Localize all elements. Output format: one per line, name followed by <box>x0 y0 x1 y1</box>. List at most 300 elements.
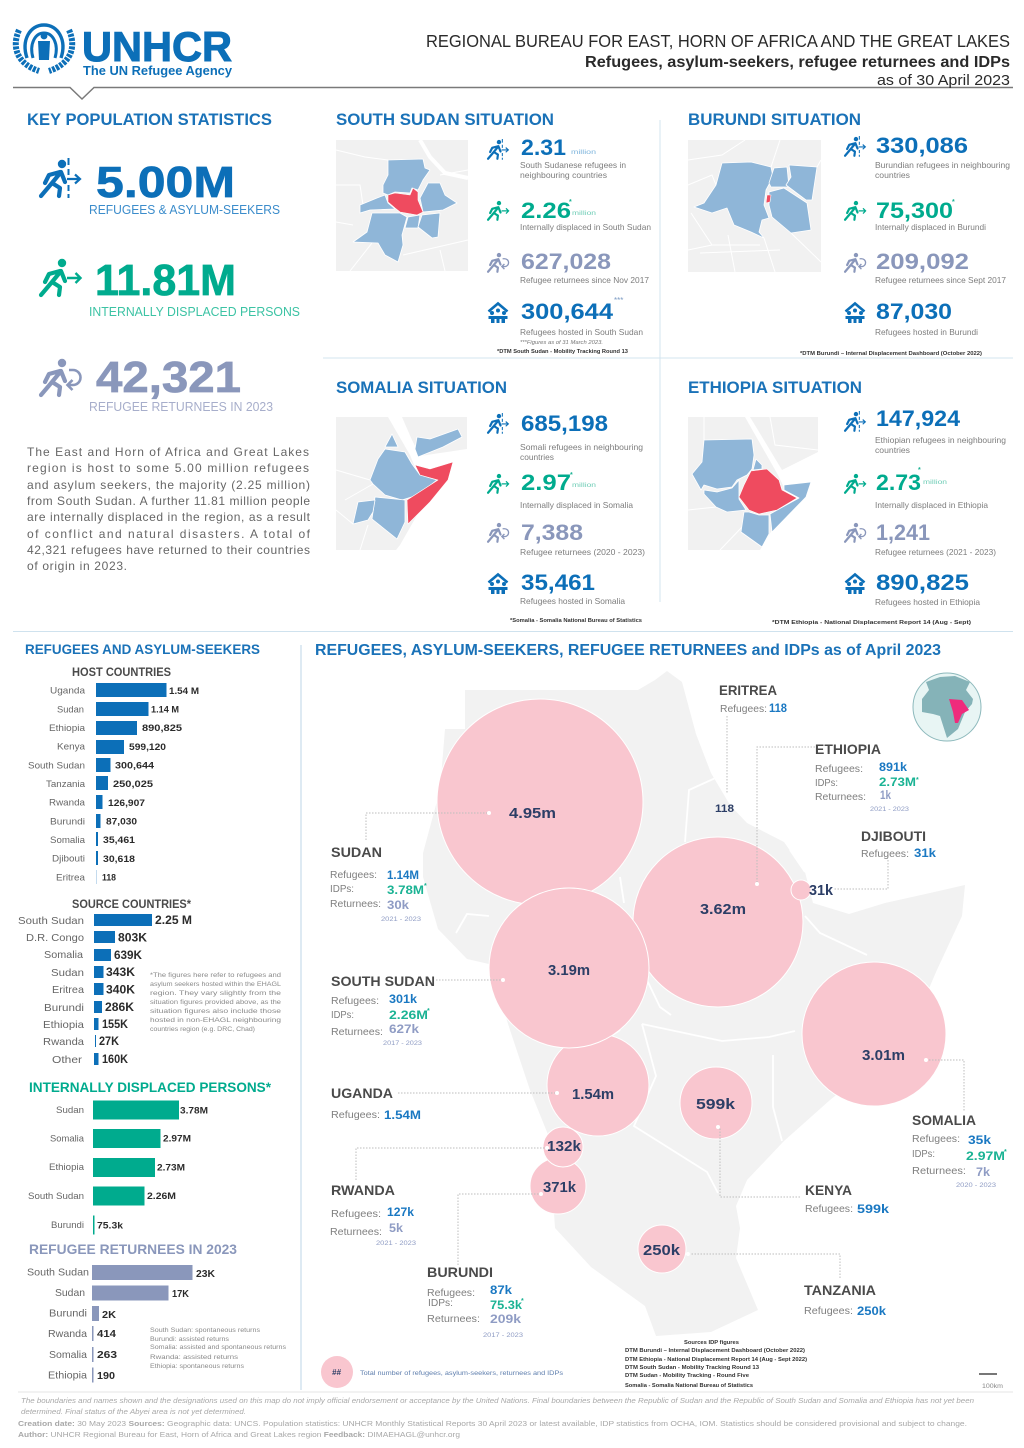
stat: Burundi IDPs <box>845 198 986 232</box>
bubble: Somalia <box>802 962 946 1106</box>
callout: South Sudan: 301k <box>389 992 417 1006</box>
bar chart: source countries: 343K <box>106 967 136 979</box>
callout: Eritrea: 118 <box>769 701 787 715</box>
stat: refugees hosted in Somalia <box>488 570 625 606</box>
callout: Burundi: 75.3k <box>490 1298 522 1312</box>
icon: UNHCR emblem <box>16 25 72 71</box>
heading: refugee returnees in 2023: REFUGEE RETURNEES IN 2023 <box>29 1241 237 1257</box>
stat: South Sudan IDPs: Internally displaced in South Sudan <box>520 222 651 232</box>
divider: situations vertical <box>659 120 661 602</box>
stat: Somali refugees: Somali refugees in neighbouring <box>520 442 643 452</box>
bar chart: host countries: 35,461 <box>103 835 136 846</box>
bubble: Tanzania <box>638 1225 686 1273</box>
callout: Somalia: 7k <box>976 1165 990 1179</box>
stat: South Sudan IDPs: * <box>569 199 572 206</box>
stat: refugee returnees: REFUGEE RETURNEES IN 2023 <box>89 400 273 414</box>
bar chart: host countries: 890,825 <box>142 723 183 734</box>
stat: Ethiopia IDPs: 2.73 <box>876 470 921 495</box>
stat: refugees and asylum-seekers: REFUGEES & ASYLUM-SEEKERS <box>89 203 280 217</box>
bar chart: returnees: Ethiopia <box>48 1370 87 1382</box>
stat: Somali refugees: 685,198 <box>521 411 608 436</box>
bubble values: 1.54m <box>572 1086 614 1103</box>
heading: key population statistics: KEY POPULATION STATISTICS <box>27 110 272 129</box>
sources: IDP figures: DTM Burundi – Internal Displacement Dashboard (October 2022) <box>625 1348 805 1354</box>
bar chart: IDPs: 2.26M <box>147 1191 176 1202</box>
text block: regional summary: The East and Horn of Africa and Great Lakes <box>27 445 309 459</box>
bar chart: host countries: 126,907 <box>108 798 145 809</box>
bar chart: host countries: 1.54 M <box>169 686 199 697</box>
bar chart: source countries: 639K <box>114 950 143 962</box>
bar chart: IDPs: South Sudan <box>28 1191 84 1202</box>
bar chart: host countries: 250,025 <box>113 779 154 790</box>
map: South Sudan neighbours <box>336 140 468 271</box>
sources: IDP figures: DTM South Sudan - Mobility Tracking Round 13 <box>625 1365 759 1371</box>
callout: Somalia: * <box>1004 1149 1007 1156</box>
callout: Sudan: IDPs: <box>330 883 354 895</box>
bar chart: host countries: 599,120 <box>129 742 166 753</box>
bubble values: 132k <box>547 1138 582 1155</box>
stat: internally displaced persons <box>41 256 300 319</box>
note: source countries: hosted in non-EHAGL neighbouring <box>150 1017 281 1024</box>
callout: Tanzania: Refugees: <box>804 1305 853 1317</box>
callout: Eritrea: ERITREA <box>719 682 777 698</box>
bar chart: host countries: Sudan <box>57 704 84 716</box>
base map <box>423 671 965 1336</box>
footer: disclaimer and credits: The boundaries and names shown and the designations used on this map do not imply official endorsement or acceptance by the United Nations. Final boundaries between the Republic of Sudan and the Republic of South Sudan and Somalia and Ethiopia has not yet been <box>21 1396 974 1405</box>
stat: refugees hosted in Burundi: Refugees hosted in Burundi <box>875 327 978 337</box>
bar chart: source countries: South Sudan <box>18 915 84 927</box>
callout: Somalia: Returnees: <box>912 1165 966 1177</box>
callout: Somalia: SOMALIA <box>912 1112 976 1128</box>
text block: regional summary: region is host to some 5.00 million refugees <box>27 461 309 475</box>
callout: Uganda: UGANDA <box>331 1085 393 1101</box>
bubble: Rwanda <box>543 1127 583 1167</box>
bar chart: returnees: 23K <box>196 1269 216 1280</box>
heading: Somalia situation: SOMALIA SITUATION <box>336 378 507 397</box>
callout: Sudan: * <box>424 883 427 890</box>
callout: South Sudan: 2.26M <box>389 1008 428 1022</box>
callout: Ethiopia <box>815 741 919 813</box>
bar chart: IDPs: Ethiopia <box>49 1162 85 1173</box>
bar chart: returnees: 17K <box>172 1289 190 1300</box>
callout: Djibouti: DJIBOUTI <box>861 828 926 844</box>
heading: Ethiopia situation: ETHIOPIA SITUATION <box>688 378 862 397</box>
bar chart: host countries: 300,644 <box>115 760 155 772</box>
stat: Somali refugees: countries <box>520 452 554 462</box>
callout: Sudan: SUDAN <box>331 844 382 860</box>
scale bar: 100km <box>982 1383 1003 1390</box>
stat: South Sudan IDPs: million <box>572 210 597 217</box>
text block: regional summary: from South Sudan. A further 11.81 million people <box>27 494 310 508</box>
text block: regional summary: of conflict and natural disasters. A total of <box>27 527 311 541</box>
footer: disclaimer and credits: Author: UNHCR Regional Bureau for East, Horn of Africa and Great Lakes region Feedback: DIMAEHAGL@unhcr.org <box>18 1430 460 1439</box>
callout: Burundi: 87k <box>490 1283 512 1297</box>
stat: Ethiopia returnees <box>845 520 996 557</box>
text block: regional summary: 42,321 refugees have returned to their countries <box>27 543 310 557</box>
bubble values: 31k <box>809 882 834 899</box>
stat: refugees hosted in South Sudan: ***Figures as of 31 March 2023. <box>520 340 603 346</box>
bar chart: source countries: Ethiopia <box>43 1019 84 1031</box>
legend: Total number of refugees, asylum-seekers, returnees and IDPs <box>360 1370 564 1377</box>
callout: Rwanda: Returnees: <box>330 1226 382 1238</box>
stat: refugees and asylum-seekers: 5.00M <box>96 158 235 207</box>
callout: South Sudan: IDPs: <box>331 1009 354 1021</box>
map: Burundi neighbours <box>688 140 821 272</box>
panel: Somalia situation <box>336 378 645 624</box>
text block: regional summary: and asylum seekers, the majority (2.25 million) <box>27 478 310 492</box>
stat: refugees hosted in South Sudan: 300,644 <box>521 299 614 324</box>
bar chart: host countries: Rwanda <box>49 798 86 808</box>
bar chart: IDPs: 3.78M <box>180 1106 208 1116</box>
callout: Ethiopia: Returnees: <box>815 791 866 803</box>
callout: Rwanda: 127k <box>387 1205 414 1219</box>
bar chart: IDPs: 2.97M <box>163 1134 191 1144</box>
title block: as of 30 April 2023 <box>877 72 1010 89</box>
sources: IDP figures <box>625 1340 807 1389</box>
bar chart: host countries: 87,030 <box>106 816 137 828</box>
panel: refugee returnees chart <box>27 1241 286 1382</box>
sources: IDP figures: DTM Ethiopia - National Displacement Report 14 (Aug - Sept 2022) <box>625 1357 807 1363</box>
divider: situations horizontal <box>323 357 1013 359</box>
stat: South Sudan returnees: 627,028 <box>521 249 611 274</box>
callout: Somalia: 2020 - 2023 <box>956 1183 997 1189</box>
callout: Sudan <box>330 844 427 923</box>
note: source countries: asylum seekers hosted within the EHAGL <box>150 981 281 988</box>
header rule with notch <box>13 88 1013 99</box>
source note: Somalia: *Somalia - Somalia National Bureau of Statistics <box>510 618 642 624</box>
scale bar <box>979 1373 1003 1390</box>
callout: Tanzania: TANZANIA <box>804 1282 876 1298</box>
callout: Kenya: KENYA <box>805 1182 852 1198</box>
bubble: Ethiopia <box>633 837 803 1007</box>
panel: internally displaced persons chart <box>28 1080 272 1234</box>
bar chart: source countries: 155K <box>102 1019 129 1031</box>
callout: Kenya: 599k <box>857 1202 889 1216</box>
callout: Somalia: 35k <box>968 1133 991 1147</box>
callout: Kenya: Refugees: <box>805 1203 853 1215</box>
stat: refugees hosted in Ethiopia: Refugees hosted in Ethiopia <box>875 597 980 607</box>
stat: Somalia IDPs: * <box>570 472 573 479</box>
stat: Burundi IDPs: 75,300 <box>876 198 953 223</box>
bubble values: 371k <box>543 1179 577 1196</box>
divider: section <box>13 630 1013 632</box>
bar chart: returnees <box>27 1265 216 1382</box>
callout: Ethiopia: 891k <box>879 760 907 774</box>
heading: South Sudan situation: SOUTH SUDAN SITUATION <box>336 110 554 129</box>
stat: Ethiopian refugees: countries <box>875 445 910 455</box>
callout: Rwanda: Refugees: <box>331 1208 381 1220</box>
stat: Ethiopia IDPs: Internally displaced in Ethiopia <box>875 500 988 510</box>
callout: Ethiopia: IDPs: <box>815 777 838 789</box>
callout: Somalia: Refugees: <box>912 1133 960 1145</box>
bar chart: IDPs: 2.73M <box>157 1162 185 1174</box>
bar chart: host countries: Tanzania <box>46 779 86 790</box>
bar chart: source countries: 160K <box>102 1054 129 1066</box>
bar chart: IDPs: 75.3k <box>97 1220 124 1232</box>
bar chart: host countries: Burundi <box>50 816 85 828</box>
bar chart: host countries: 118 <box>102 872 116 884</box>
map: Ethiopia neighbours <box>688 417 818 550</box>
stat: refugees hosted in South Sudan: *** <box>614 296 623 305</box>
callout: South Sudan: Refugees: <box>331 995 379 1007</box>
note: source countries <box>150 972 282 1033</box>
heading: internally displaced persons: INTERNALLY DISPLACED PERSONS* <box>29 1080 272 1095</box>
bar chart: source countries: 27K <box>99 1036 120 1048</box>
title block: Refugees, asylum-seekers, refugee returnees and IDPs <box>585 54 1010 71</box>
stat: refugees hosted in Ethiopia <box>846 570 980 607</box>
bubble: South Sudan <box>489 888 649 1048</box>
bar chart: host countries: Ethiopia <box>49 723 86 734</box>
callout: Burundi: 2017 - 2023 <box>483 1333 524 1339</box>
bubble values <box>509 803 905 1259</box>
callout: Djibouti: 31k <box>914 846 936 860</box>
bubble values: 3.62m <box>700 901 746 918</box>
note: source countries: region. They vary slightly from the <box>150 990 282 997</box>
bar chart: returnees: 414 <box>97 1329 116 1340</box>
callout: Uganda: 1.54M <box>384 1108 421 1122</box>
callout: Djibouti: Refugees: <box>861 848 909 860</box>
stat: Ethiopia IDPs <box>845 467 988 510</box>
stat: Somalia IDPs: Internally displaced in Somalia <box>520 500 633 510</box>
bar chart: host countries: Uganda <box>50 686 86 696</box>
bar chart: returnees: Sudan <box>55 1287 85 1299</box>
note: source countries: countries region (e.g. DRC, Chad) <box>150 1026 255 1033</box>
stat: Somali refugees <box>488 411 643 462</box>
panel: South Sudan situation <box>336 110 651 355</box>
callout: Somalia <box>912 1112 1007 1189</box>
bar chart: source countries: 286K <box>105 1002 135 1014</box>
bar chart: returnees: South Sudan <box>27 1266 89 1278</box>
stat: Burundi returnees: Refugee returnees since Sept 2017 <box>875 275 1006 285</box>
stat: Burundi IDPs: Internally displaced in Burundi <box>875 222 986 232</box>
stat: Burundi returnees: 209,092 <box>876 249 969 274</box>
stat: Somalia returnees: 7,388 <box>521 520 583 545</box>
callout: Rwanda: 2021 - 2023 <box>376 1241 417 1247</box>
stat: South Sudan IDPs: 2.26 <box>521 198 571 223</box>
footer: disclaimer and credits <box>18 1396 974 1439</box>
bubble: Sudan <box>437 699 643 905</box>
stat: refugees hosted in Burundi <box>846 299 978 337</box>
bar chart: source countries <box>18 914 192 1066</box>
bar chart: host countries: Somalia <box>50 835 86 846</box>
stat: Ethiopia IDPs: million <box>923 479 948 486</box>
text block: regional summary: are internally displaced in the region, as a result <box>27 510 311 524</box>
note: returnee types: South Sudan: spontaneous returns <box>150 1328 260 1334</box>
subheading: host countries: HOST COUNTRIES <box>72 667 171 679</box>
title block <box>426 31 1010 89</box>
callout: Sudan: 3.78M <box>387 883 424 897</box>
legend <box>321 1356 564 1388</box>
stat: South Sudanese refugees: million <box>571 149 597 156</box>
icon: locator globe <box>913 673 981 741</box>
stat: Burundian refugees: 330,086 <box>876 133 968 158</box>
stat: refugees hosted in Somalia: 35,461 <box>521 570 595 595</box>
stat: Somalia IDPs <box>488 470 633 510</box>
stat: Burundian refugees: Burundian refugees in neighbouring <box>875 160 1010 170</box>
note: returnee types: Somalia: assisted and spontaneous returns <box>150 1345 286 1351</box>
footer: disclaimer and credits: determined. Final status of the Abyei area is not yet determined. <box>21 1407 246 1416</box>
map title: REFUGEES, ASYLUM-SEEKERS, REFUGEE RETURNEES and IDPs as of April 2023 <box>315 642 941 659</box>
bar chart: source countries: Eritrea <box>52 984 84 996</box>
callout: Somalia: IDPs: <box>912 1148 935 1160</box>
callout: Ethiopia: Refugees: <box>815 763 863 775</box>
callout: Ethiopia: 2021 - 2023 <box>870 807 910 813</box>
stat: refugees hosted in Burundi: 87,030 <box>876 299 952 324</box>
header: UNHCR logo: UNHCR <box>82 23 232 70</box>
bar chart: source countries: Burundi <box>44 1002 84 1014</box>
header: UNHCR logo <box>16 23 233 78</box>
callout: Rwanda: RWANDA <box>331 1182 395 1198</box>
note: source countries: *The figures here refer to refugees and <box>150 972 281 979</box>
bubble: Djibouti <box>791 880 811 900</box>
stat: refugees hosted in Somalia: Refugees hosted in Somalia <box>520 596 625 606</box>
bar chart: returnees: Burundi <box>49 1308 87 1320</box>
stat: Ethiopian refugees: Ethiopian refugees in neighbouring <box>875 435 1006 445</box>
stat: Somalia returnees <box>488 520 645 557</box>
sources: IDP figures: Sources IDP figures <box>684 1340 739 1346</box>
bar chart: host countries: 1.14 M <box>151 704 179 716</box>
source note: Ethiopia: *DTM Ethiopia - National Displacement Report 14 (Aug - Sept) <box>772 620 971 626</box>
stat: Ethiopia returnees: Refugee returnees (2021 - 2023) <box>875 547 996 557</box>
bubble values: 3.19m <box>548 962 590 979</box>
stat: refugee returnees <box>41 353 273 414</box>
bar chart: returnees: 2K <box>102 1310 117 1321</box>
callout: Djibouti <box>861 828 936 860</box>
stat: Burundi returnees <box>845 249 1006 285</box>
header: UNHCR logo: The UN Refugee Agency <box>83 63 233 78</box>
stat: refugees and asylum-seekers <box>41 158 280 217</box>
leader lines <box>356 716 964 1278</box>
stat: South Sudanese refugees: 2.31 <box>521 135 566 160</box>
heading: Burundi situation: BURUNDI SITUATION <box>688 110 861 129</box>
bubble values: 118 <box>715 803 734 815</box>
stat: internally displaced persons: INTERNALLY DISPLACED PERSONS <box>89 305 300 319</box>
bubble: Burundi <box>530 1158 586 1214</box>
stat: Ethiopia IDPs: * <box>918 467 921 474</box>
bar chart: source countries: D.R. Congo <box>26 932 84 944</box>
callout: Sudan: Refugees: <box>330 869 377 881</box>
bar chart: IDPs: Sudan <box>56 1105 84 1116</box>
source note: South Sudan: *DTM South Sudan - Mobility Tracking Round 13 <box>497 349 628 355</box>
callout: Kenya <box>805 1182 889 1216</box>
bar chart: IDPs: Burundi <box>51 1220 84 1231</box>
stat: South Sudanese refugees <box>488 135 626 180</box>
callout: Uganda: Refugees: <box>331 1109 380 1121</box>
bar chart: host countries: Eritrea <box>56 872 86 884</box>
callout: Rwanda <box>330 1182 417 1247</box>
callout: Burundi: Returnees: <box>427 1313 480 1325</box>
callout: Burundi: 209k <box>490 1312 521 1326</box>
note: returnee types <box>150 1328 286 1370</box>
callout: Rwanda: 5k <box>389 1221 403 1235</box>
stat: South Sudan IDPs <box>488 198 651 232</box>
map: Somalia neighbours <box>336 417 467 550</box>
heading: refugees and asylum-seekers: REFUGEES AND ASYLUM-SEEKERS <box>25 641 260 657</box>
bubble: Kenya <box>680 1067 752 1139</box>
stat: Burundi IDPs: * <box>952 199 955 206</box>
stat: Somalia IDPs: million <box>572 482 597 489</box>
callout: Sudan: 30k <box>387 898 409 912</box>
bar chart: returnees: 190 <box>97 1371 115 1382</box>
callout: Burundi: Refugees: <box>427 1287 475 1299</box>
text block: regional summary <box>27 445 311 573</box>
callout: Sudan: Returnees: <box>330 898 381 910</box>
callout: Tanzania <box>804 1282 886 1318</box>
callout: Burundi: * <box>521 1298 524 1305</box>
stat: Ethiopian refugees <box>845 406 1006 455</box>
stat: refugees hosted in South Sudan: Refugees hosted in South Sudan <box>520 327 643 337</box>
bar chart: source countries: 340K <box>106 984 136 996</box>
map: bubble map of the region <box>321 671 1007 1390</box>
bar chart: source countries: Rwanda <box>43 1036 84 1048</box>
callout: Burundi: IDPs: <box>428 1297 453 1309</box>
callout: Ethiopia: ETHIOPIA <box>815 741 881 757</box>
panel: Burundi situation <box>688 110 1010 357</box>
note: returnee types: Rwanda: assisted returns <box>150 1355 238 1361</box>
bubble: Uganda <box>547 1034 649 1136</box>
note: source countries: situation figures also include those <box>150 1008 281 1015</box>
stat: refugee returnees: 42,321 <box>96 353 241 402</box>
bar chart: host countries <box>28 683 199 884</box>
stat: South Sudan returnees: Refugee returnees since Nov 2017 <box>520 275 649 285</box>
callout: Eritrea: Refugees: <box>720 703 767 715</box>
note: returnee types: Burundi: assisted returns <box>150 1337 229 1343</box>
bar chart: returnees: 263 <box>97 1350 118 1361</box>
bar chart: source countries: Other <box>52 1054 83 1066</box>
callout: Ethiopia: 2.73M <box>879 775 916 789</box>
bubble values: 250k <box>643 1242 681 1259</box>
stat: Ethiopia returnees: 1,241 <box>876 520 930 545</box>
stat: South Sudanese refugees: neighbouring countries <box>520 170 607 180</box>
panel: refugees and asylum-seekers charts <box>18 641 282 1066</box>
divider: left column <box>300 645 302 1390</box>
note: returnee types: Ethiopia: spontaneous returns <box>150 1364 244 1370</box>
text block: regional summary: of origin in 2023. <box>27 559 127 573</box>
bar chart: host countries: South Sudan <box>28 760 85 772</box>
callout: South Sudan <box>331 973 435 1047</box>
callout: Burundi: BURUNDI <box>427 1264 493 1280</box>
sources: IDP figures: DTM Sudan - Mobility Tracking - Round Five <box>625 1373 749 1379</box>
stat: refugees hosted in South Sudan <box>488 296 643 346</box>
bar chart: source countries: Somalia <box>44 949 83 961</box>
callout: Burundi <box>427 1264 524 1339</box>
stat: refugees hosted in Ethiopia: 890,825 <box>876 570 969 595</box>
bubble values: 3.01m <box>862 1047 905 1064</box>
footer: disclaimer and credits: Creation date: 30 May 2023 Sources: Geographic data: UNCS. Population statistics: UNHCR Monthly Statistical Reports 30 April 2023 or latest available, IDP statistics from OCHA, IOM. Statistics should be considered provisional and subject to change. <box>18 1419 967 1428</box>
callout: Tanzania: 250k <box>857 1304 886 1318</box>
panel: Ethiopia situation <box>688 378 1006 626</box>
source note: Burundi: *DTM Burundi – Internal Displacement Dashboard (October 2022) <box>800 351 982 357</box>
stat: South Sudan returnees <box>488 249 649 285</box>
stat: South Sudanese refugees: South Sudanese refugees in <box>520 160 626 170</box>
callout: Ethiopia: 1k <box>880 788 891 802</box>
bar chart: host countries: Kenya <box>57 742 86 752</box>
panel: key population statistics <box>27 110 311 573</box>
stat: internally displaced persons: 11.81M <box>95 256 236 305</box>
bar chart: source countries: Sudan <box>51 967 84 979</box>
bubble values: 4.95m <box>509 805 556 822</box>
bar chart: host countries: 30,618 <box>103 854 135 865</box>
callout: South Sudan: 627k <box>389 1022 419 1036</box>
callout: Sudan: 1.14M <box>387 868 419 882</box>
callout: Ethiopia: * <box>916 777 919 784</box>
bar chart: IDPs <box>28 1100 208 1234</box>
bar chart: host countries: Djibouti <box>52 854 85 864</box>
divider: footer <box>18 1391 1013 1393</box>
stat: Burundian refugees: countries <box>875 170 910 180</box>
stat: Somalia IDPs: 2.97 <box>521 470 571 495</box>
bar chart: IDPs: Somalia <box>50 1134 85 1144</box>
